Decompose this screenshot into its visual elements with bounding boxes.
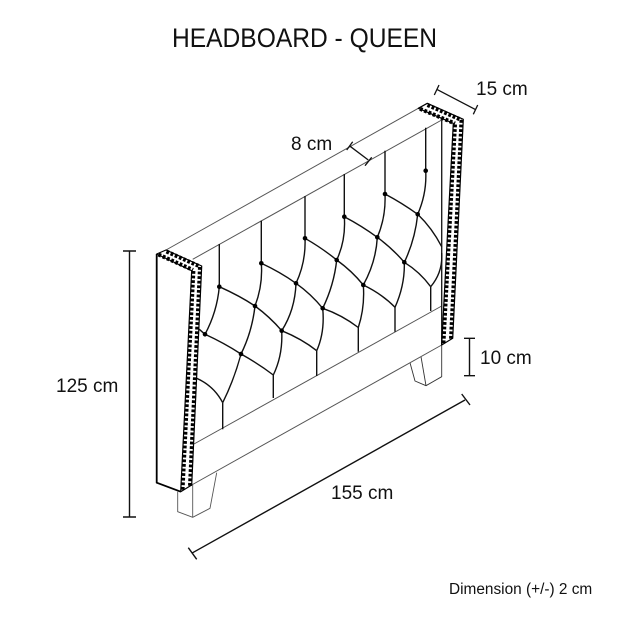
headboard drawing (157, 103, 463, 517)
label: 125 cm: 125 cm (56, 376, 118, 397)
label: 8 cm: 8 cm (291, 134, 332, 155)
diagonal arcs falling right (219, 287, 317, 351)
diagonal arcs falling left (205, 287, 219, 334)
left studded strip (157, 250, 202, 492)
dimension: 125 cm height (123, 251, 136, 517)
label: 10 cm: 10 cm (480, 348, 532, 369)
dimension: 8 cm frame (347, 142, 372, 166)
vertical pleats (219, 128, 426, 287)
right panel inner edge (441, 120, 443, 345)
label: 155 cm: 155 cm (331, 483, 393, 504)
dimension: 15 cm depth (434, 85, 478, 114)
quilted tufting lines (197, 128, 442, 429)
left leg (178, 473, 217, 517)
left panel outline (157, 254, 181, 492)
tuft buttons (203, 168, 428, 356)
note: dimension tolerance: Dimension (+/-) 2 cm (449, 581, 592, 598)
frame lines (166, 108, 442, 485)
label: 15 cm: 15 cm (476, 79, 528, 100)
dimension: 155 cm width (188, 394, 470, 559)
right leg (410, 345, 442, 386)
right studded strip (418, 103, 463, 345)
dimension: 10 cm leg (464, 338, 475, 376)
title: HEADBOARD - QUEEN (172, 23, 437, 53)
